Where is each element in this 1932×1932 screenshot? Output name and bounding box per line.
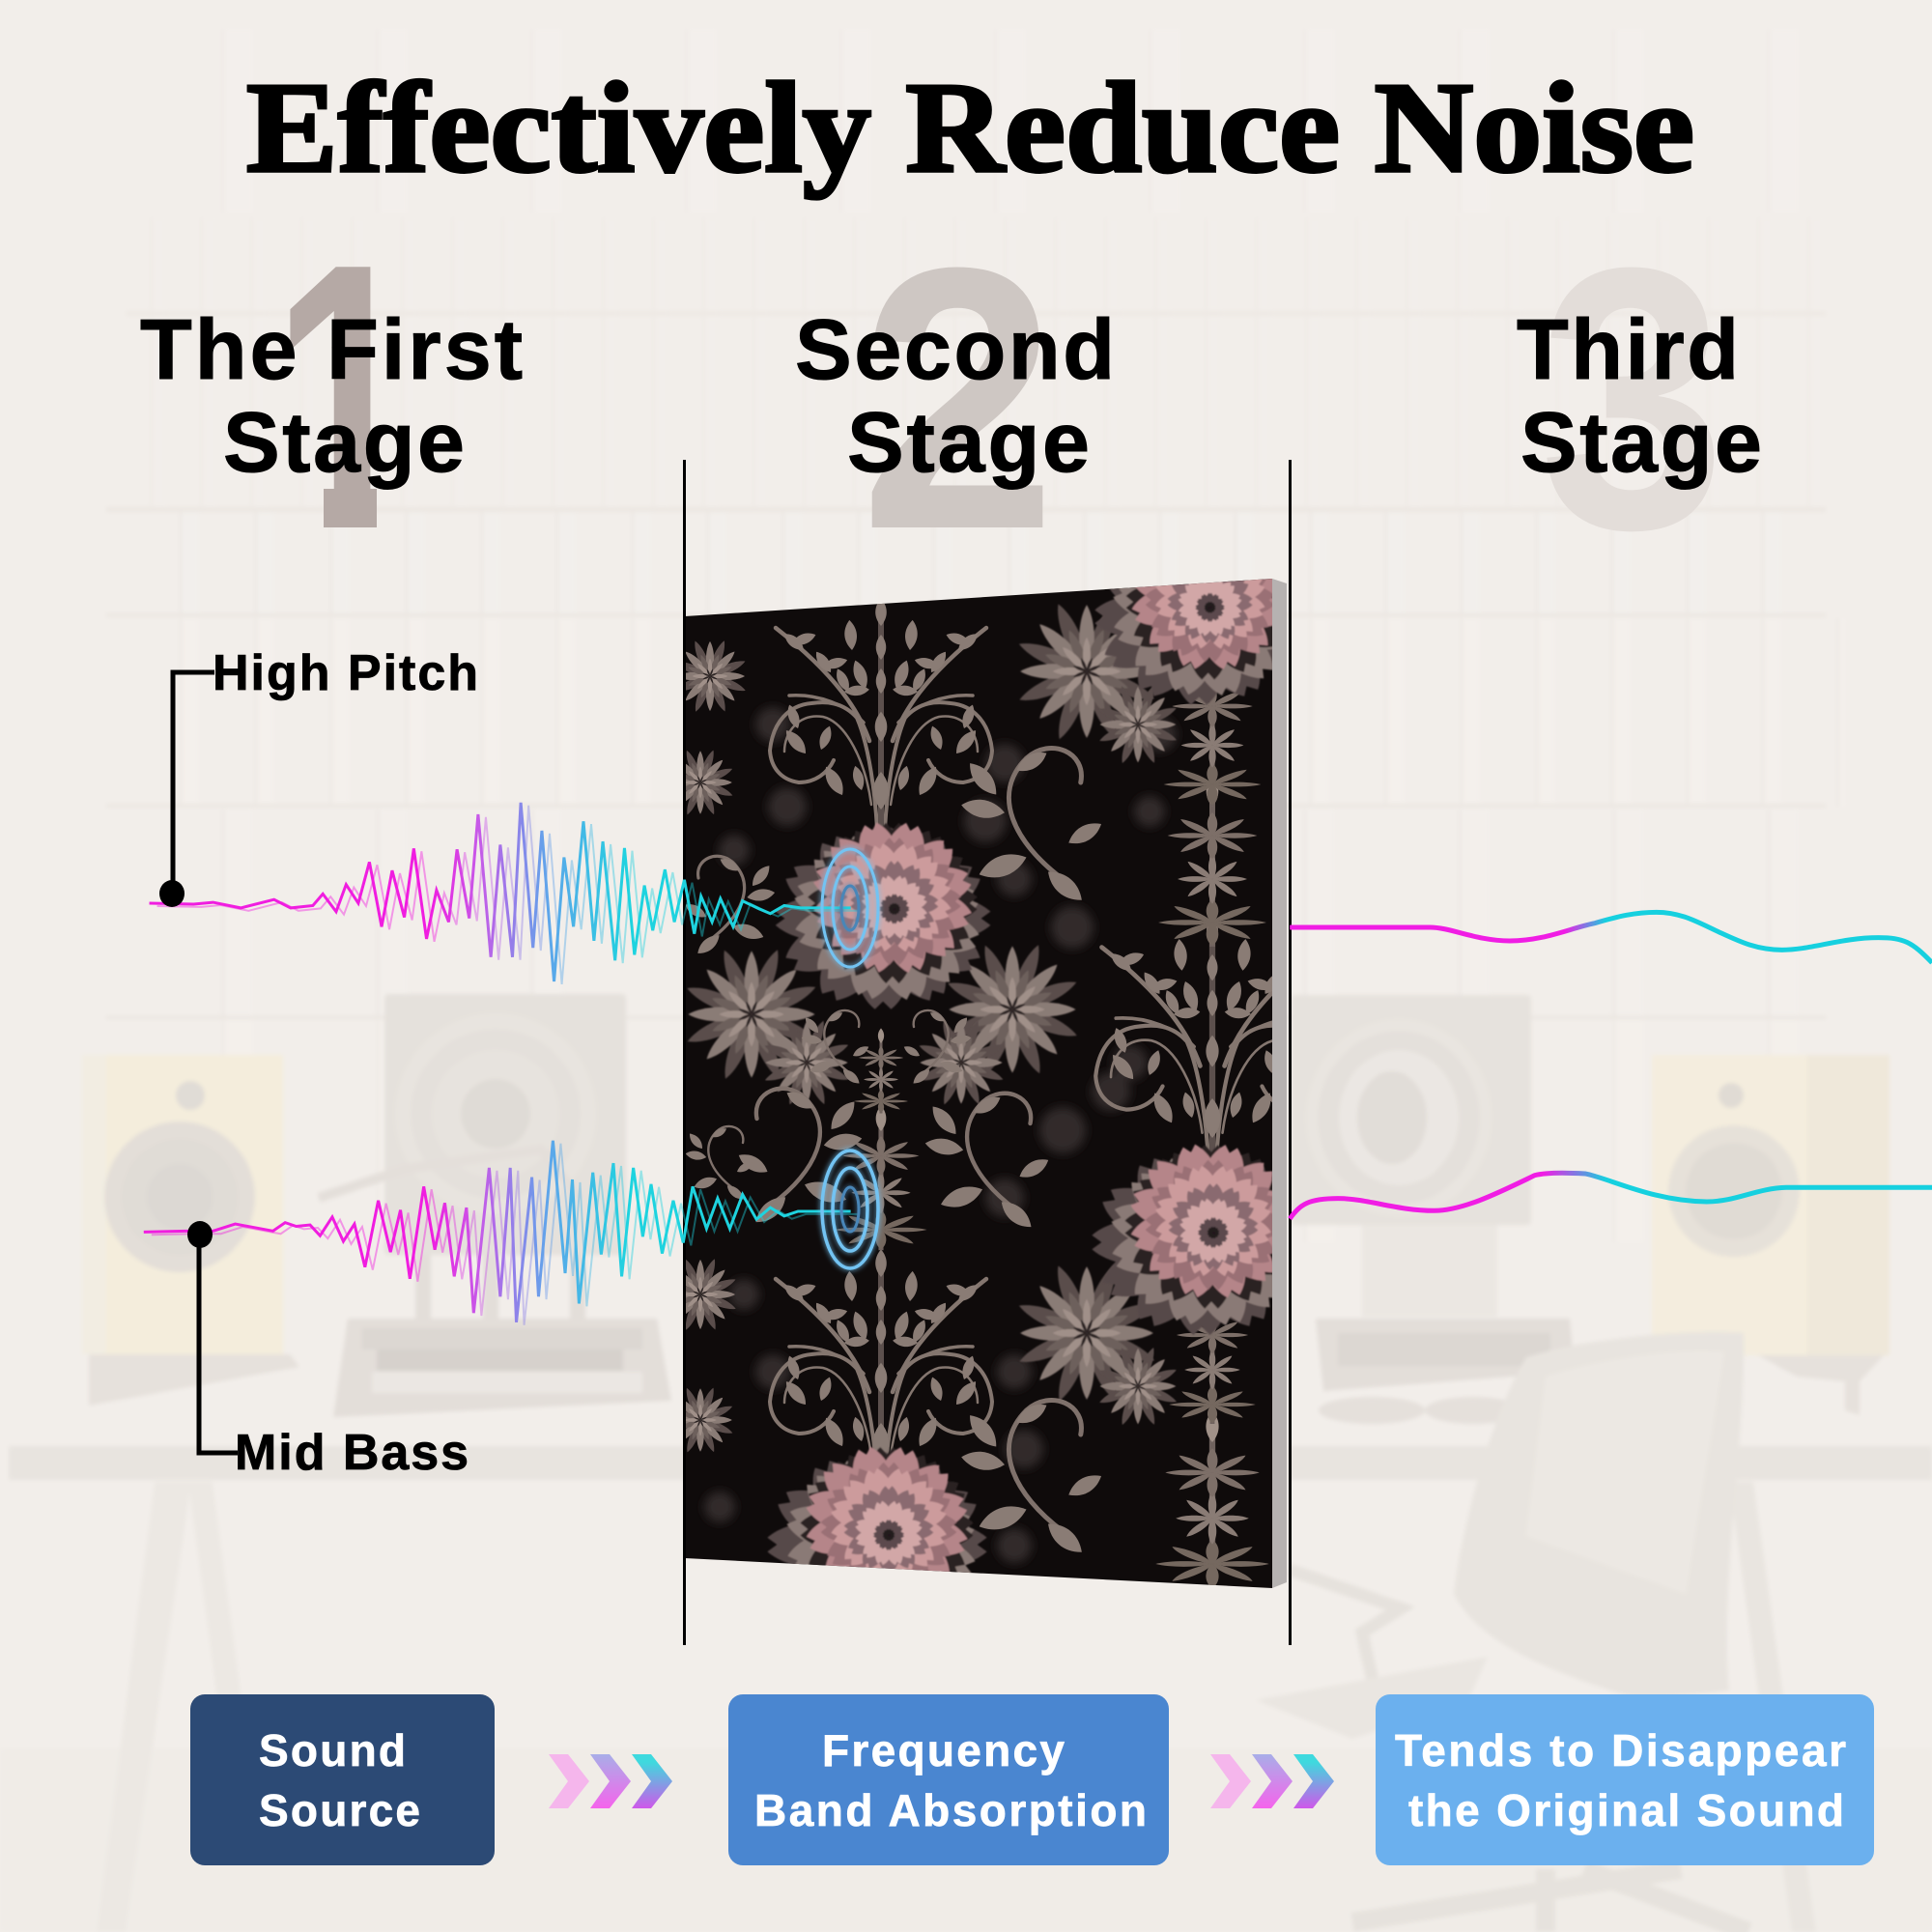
centre-left studio monitor [384,994,626,1319]
arrows: chevrons one [549,1754,672,1808]
scroll motifs [770,598,992,829]
box: sound source: Source [259,1785,420,1835]
left yellow speaker [82,1055,299,1406]
heading: third stage: Third [1517,301,1739,397]
mid bass waveform [144,1141,859,1325]
heading: first stage [140,301,523,490]
right studio monitor [1292,995,1531,1317]
desk [9,1446,1932,1932]
right keyboard and mouse [1316,1319,1575,1424]
box: frequency band absorption: Band Absorption [754,1785,1147,1835]
concentric absorption rings: lower [822,1151,878,1268]
left keyboard [333,1319,671,1417]
residual waveform: lower [1290,1173,1932,1219]
callout: high pitch [159,645,478,907]
title: Effectively Reduce Noise [246,56,1694,199]
panel side edge [1272,579,1287,1588]
callout: mid bass [187,1221,469,1481]
numeral 1: 1 [272,185,419,608]
heading: second stage: Stage [847,394,1090,490]
office chair [1256,1332,1748,1932]
heading: second stage: Second [795,301,1115,397]
divider lines [683,460,1292,1645]
box: sound source [190,1694,495,1865]
numeral 3: 3 [1539,190,1726,607]
right yellow speaker [1652,1055,1889,1415]
acoustic wall tiles [106,29,1855,1242]
panel: damask acoustic panel [686,579,1287,1588]
heading: third stage: Stage [1520,394,1762,490]
heading: third stage [1517,301,1762,490]
box: tends to disappear: the Original Sound [1408,1785,1844,1835]
residual waveform: upper [1290,912,1932,963]
heading: first stage: The First [140,301,523,397]
microphone arm left [319,1150,580,1198]
dim background leaves [704,707,1177,1563]
big stage numbers [272,185,1726,608]
concentric absorption rings: upper [822,849,878,967]
box: frequency band absorption [728,1694,1169,1865]
box: frequency band absorption: Frequency [822,1725,1065,1776]
side flowers and curls [687,950,815,1079]
callout: mid bass: Mid Bass [235,1425,469,1481]
numeral 2: 2 [860,189,1057,607]
box: tends to disappear: Tends to Disappear [1395,1725,1846,1776]
arrows: chevrons two [1210,1754,1334,1808]
heading: second stage [795,301,1115,490]
box: tends to disappear [1376,1694,1874,1865]
heading: first stage: Stage [223,394,465,490]
peony flowers [775,822,991,1009]
callout: high pitch: High Pitch [213,645,478,701]
high pitch waveform [150,803,859,984]
floor [0,1748,1932,1932]
box: sound source: Sound [259,1725,406,1776]
